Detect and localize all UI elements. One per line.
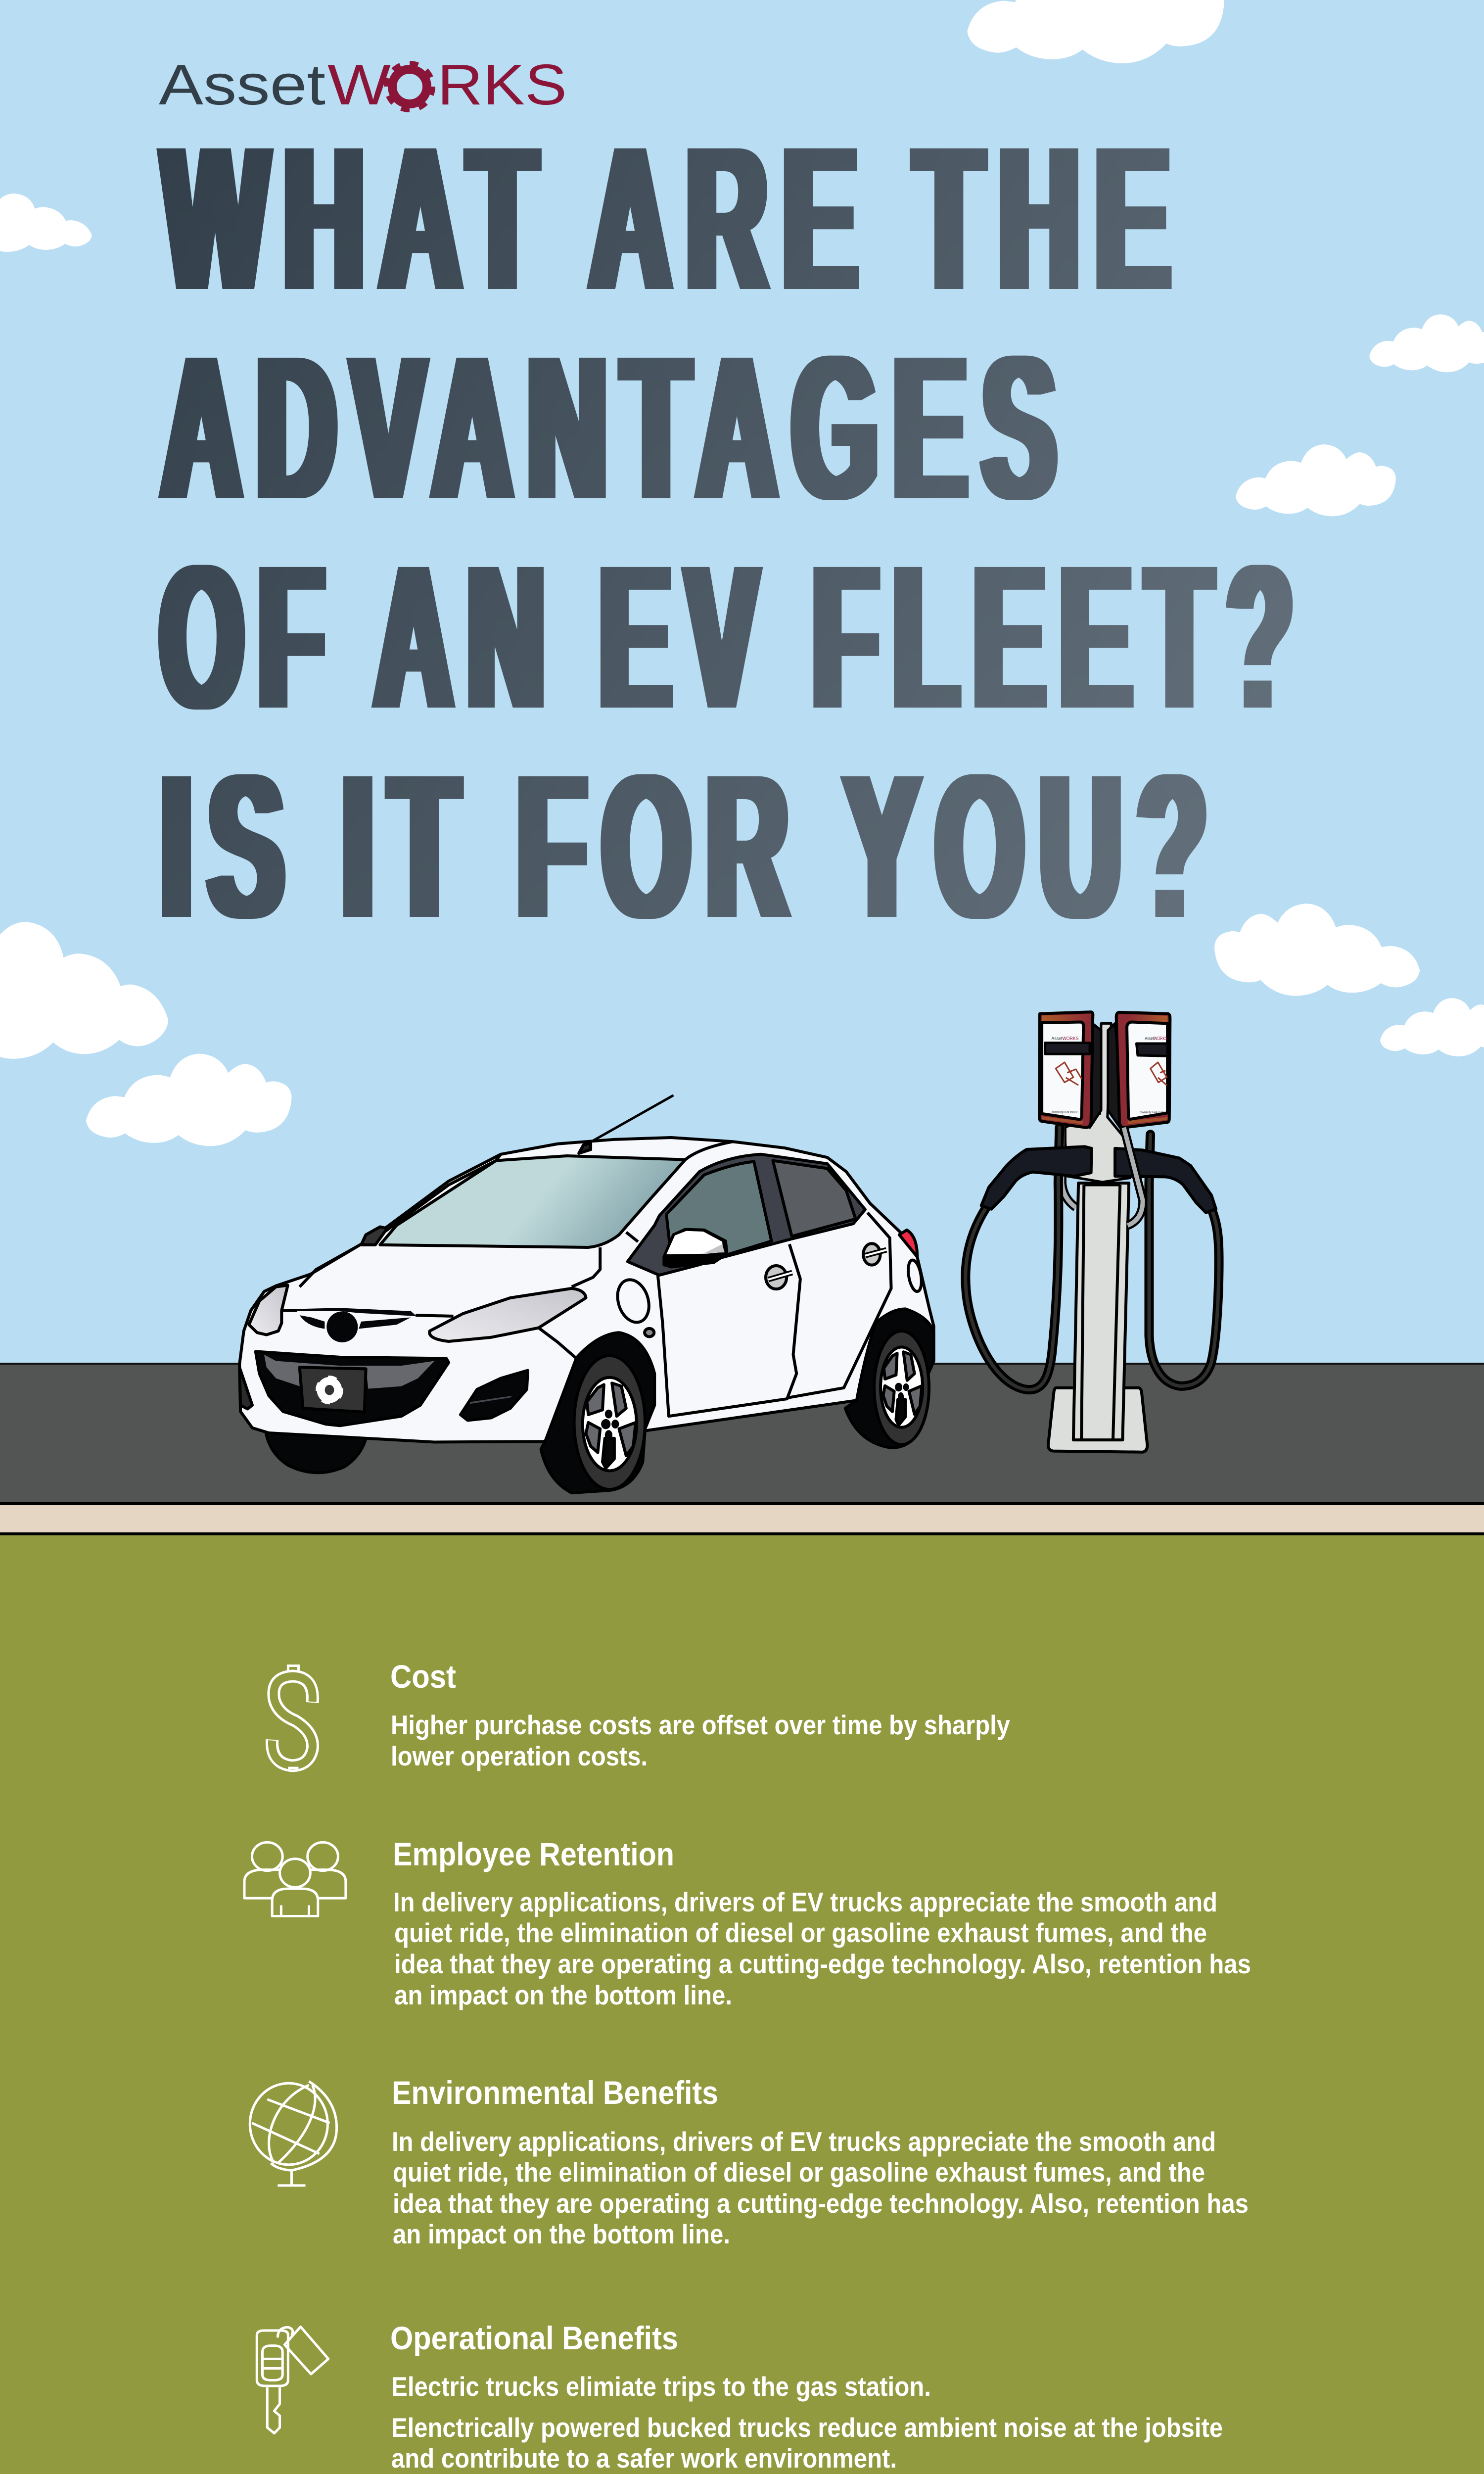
sky background bbox=[0, 0, 1484, 1366]
charger cable left inner bbox=[1062, 1126, 1076, 1207]
front headlamp near bbox=[429, 1288, 586, 1341]
icon: logo gear bbox=[387, 64, 432, 109]
charger base bbox=[1048, 1388, 1147, 1452]
charger handle right bbox=[1115, 1148, 1216, 1213]
text: employee retention body: quiet ride, the elimination of diesel or gasoline exhaust fumes, and the bbox=[394, 1917, 1207, 1948]
clouds bbox=[0, 0, 1484, 1146]
text: cost body: Higher purchase costs are offset over time by sharply bbox=[391, 1710, 1010, 1740]
charger footer text right: powered by FuelFocusEV bbox=[1140, 1111, 1165, 1114]
far front wheel bbox=[266, 1430, 366, 1473]
rear tyre bbox=[845, 1309, 934, 1448]
icon: three people bbox=[244, 1842, 346, 1916]
cloud: far right lower bbox=[1380, 998, 1484, 1056]
heading: employee retention: Employee Retention bbox=[393, 1836, 674, 1872]
door handle rear bbox=[863, 1243, 886, 1265]
text: environmental benefits body: an impact on the bottom line. bbox=[393, 2219, 730, 2249]
charger screen logo left: AssetWORKS bbox=[1052, 1036, 1079, 1041]
cloud: upper left bbox=[0, 193, 92, 252]
road bbox=[0, 1363, 1484, 1535]
side mirror bbox=[664, 1230, 727, 1267]
licence plate bbox=[300, 1367, 366, 1412]
illustration: white electric car bbox=[239, 1095, 934, 1493]
wheel arch marker lights bbox=[614, 1260, 924, 1336]
wiper cover bbox=[361, 1227, 387, 1245]
cloud: right lower bbox=[1214, 904, 1420, 996]
front side window bbox=[666, 1161, 772, 1257]
lower grille bbox=[256, 1351, 449, 1426]
tail light bbox=[899, 1230, 917, 1257]
logo: AssetWORKS top: Asset bbox=[159, 52, 325, 117]
text: operational benefits body: Electric trucks elimiate trips to the gas station. bbox=[391, 2371, 931, 2402]
charger back panel bbox=[1065, 1023, 1130, 1182]
logo: AssetWORKS top: RKS bbox=[437, 52, 567, 117]
icon: dollar sign bbox=[272, 1665, 313, 1768]
section: cost bbox=[272, 1658, 1010, 1771]
near front tyre bbox=[541, 1332, 654, 1493]
illustration: EV charging station bbox=[966, 1012, 1219, 1452]
text: operational benefits body bbox=[391, 2371, 1223, 2474]
car body bbox=[239, 1138, 934, 1442]
logo: AssetWORKS top bbox=[159, 52, 567, 117]
fog lamp far bbox=[239, 1367, 252, 1409]
charger cable loops bbox=[966, 1128, 1219, 1390]
side window frame bbox=[628, 1154, 865, 1275]
cloud: lower left small bbox=[86, 1054, 292, 1146]
antenna base bbox=[579, 1143, 591, 1153]
rear rim bbox=[881, 1347, 923, 1427]
windshield bbox=[380, 1156, 685, 1247]
cloud: big lower left bbox=[0, 922, 168, 1059]
panel: olive background bbox=[0, 1535, 1484, 2474]
charger unit right bbox=[1108, 1012, 1170, 1128]
grille inserts bbox=[264, 1355, 434, 1389]
icon: globe bbox=[250, 2081, 337, 2186]
text: employee retention body: idea that they are operating a cutting-edge technology. Also, retention has bbox=[394, 1949, 1251, 1979]
heading: operational benefits: Operational Benefits bbox=[390, 2320, 678, 2356]
text: employee retention body: an impact on the bottom line. bbox=[394, 1980, 732, 2010]
section: operational benefits bbox=[257, 2320, 1223, 2474]
title bbox=[160, 104, 1308, 960]
text: environmental benefits body bbox=[392, 2126, 1249, 2249]
charger footer text left: powered by FuelFocusEV bbox=[1052, 1111, 1078, 1114]
text: environmental benefits body: In delivery applications, drivers of EV trucks appreciate the smooth and bbox=[392, 2126, 1216, 2157]
cloud: top centre bbox=[967, 0, 1224, 63]
front door outline bbox=[658, 1213, 891, 1416]
cloud: right upper bbox=[1369, 314, 1484, 372]
text: cost body bbox=[391, 1710, 1010, 1771]
charger cable right inner bbox=[1124, 1128, 1143, 1226]
heading: environmental benefits: Environmental Benefits bbox=[392, 2074, 718, 2111]
icon: contactless card right bbox=[1151, 1062, 1167, 1085]
upper grille and badge bbox=[297, 1308, 417, 1342]
logo: AssetWORKS top: W bbox=[327, 52, 391, 117]
charger unit left bbox=[1039, 1012, 1101, 1128]
heading: cost: Cost bbox=[390, 1658, 456, 1695]
text: employee retention body: In delivery applications, drivers of EV trucks appreciate the smooth and bbox=[393, 1887, 1217, 1917]
front headlamp far bbox=[249, 1285, 288, 1335]
section: environmental benefits bbox=[250, 2074, 1249, 2249]
door handle front bbox=[766, 1266, 792, 1289]
cloud: right middle bbox=[1236, 444, 1396, 516]
icon: contactless card left bbox=[1056, 1062, 1082, 1085]
charger handle left bbox=[981, 1146, 1092, 1209]
icon: plate gear bbox=[318, 1378, 341, 1402]
antenna bbox=[593, 1095, 673, 1141]
section: employee retention bbox=[244, 1836, 1251, 2010]
charger pole inner panel bbox=[1081, 1185, 1120, 1440]
text: employee retention body bbox=[393, 1887, 1251, 2010]
fog lamp near bbox=[461, 1371, 528, 1420]
rear side window bbox=[773, 1161, 856, 1237]
text: operational benefits body: and contribute to a safer work environment. bbox=[391, 2443, 897, 2474]
charger screen logo right: AssetWORKS bbox=[1145, 1036, 1167, 1041]
charger pole bbox=[1073, 1183, 1129, 1440]
text: environmental benefits body: idea that they are operating a cutting-edge technology. Also, retention has bbox=[393, 2188, 1249, 2219]
text: cost body: lower operation costs. bbox=[391, 1741, 648, 1771]
near front rim bbox=[583, 1378, 637, 1471]
text: operational benefits body: Elenctrically powered bucked trucks reduce ambient noise at the jobsite bbox=[391, 2412, 1223, 2443]
body lines bbox=[281, 1142, 733, 1358]
icon: car key and tag bbox=[257, 2327, 328, 2433]
text: environmental benefits body: quiet ride, the elimination of diesel or gasoline exhaust fumes, and the bbox=[393, 2157, 1205, 2188]
